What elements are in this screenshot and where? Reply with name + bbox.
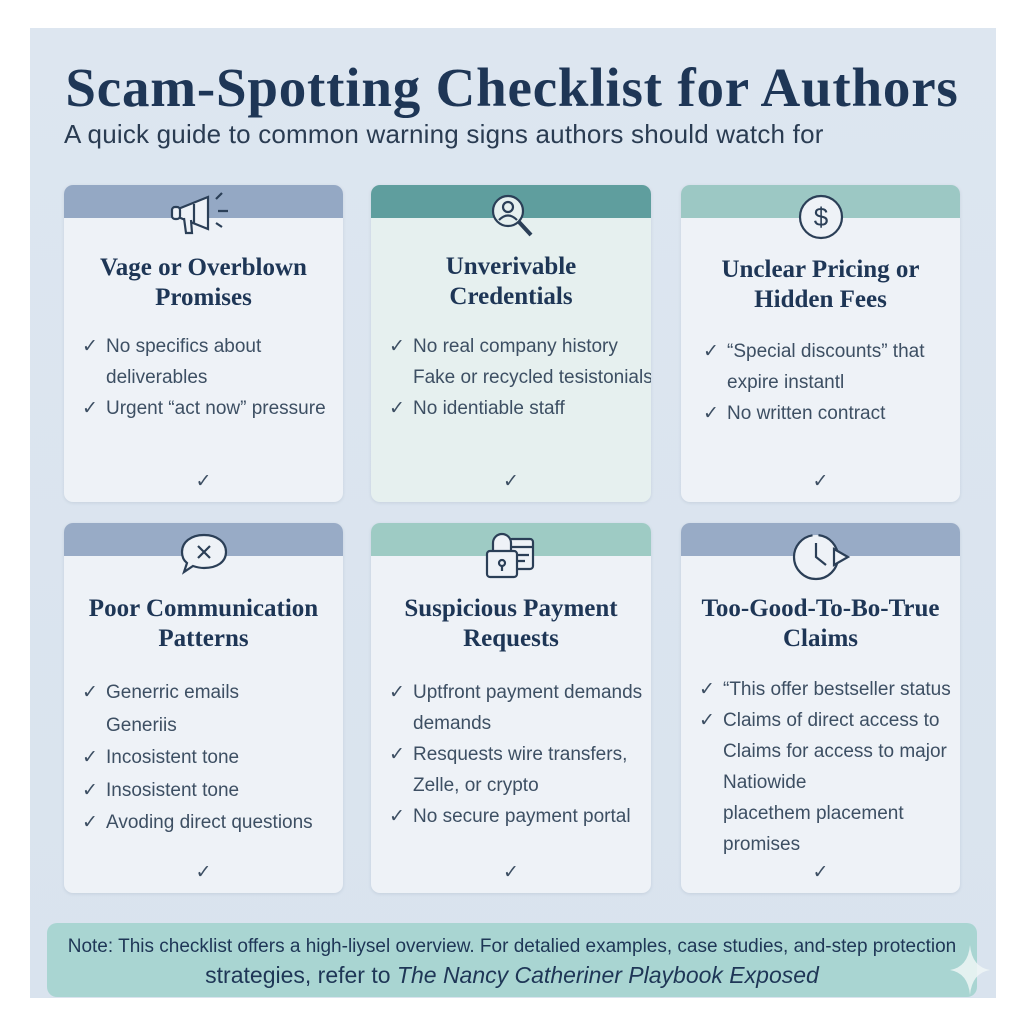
heading: Suspicious Payment xyxy=(404,595,618,622)
title: Scam-Spotting Checklist for Authors xyxy=(65,57,959,118)
bullets: Incosistent tone xyxy=(106,747,239,768)
bullets: Claims for access to major xyxy=(723,741,947,762)
bullets: Zelle, or crypto xyxy=(413,775,539,796)
bullets: Claims of direct access to xyxy=(723,710,939,731)
heading: Too-Good-To-Bo-True xyxy=(701,595,940,622)
panel: credentials: ✓ xyxy=(503,471,519,492)
icon: dollar xyxy=(798,194,844,240)
icon: magnifier xyxy=(492,194,532,236)
icon: megaphone xyxy=(170,192,228,234)
bullets: deliverables xyxy=(106,367,207,388)
panel: payment xyxy=(371,523,651,893)
heading xyxy=(404,595,618,652)
bullets: demands xyxy=(413,713,491,734)
note callout: strategies, refer to The Nancy Catheriner Playbook Exposed xyxy=(205,962,819,988)
note callout xyxy=(47,923,977,997)
bullets: No identiable staff xyxy=(413,398,565,419)
panel: communication: ✓ xyxy=(196,862,211,883)
icon: sparkle xyxy=(950,946,989,994)
heading: Requests xyxy=(463,625,559,652)
bullets: No real company history xyxy=(413,336,618,357)
icon: dollar: $ xyxy=(813,202,828,232)
subtitle: A quick guide to common warning signs authors should watch for xyxy=(64,119,824,149)
bullets: Fake or recycled tesistonials xyxy=(413,367,651,388)
panel: communication xyxy=(64,523,343,893)
bullets: Natiowide xyxy=(723,772,806,793)
heading: Poor Communication xyxy=(89,595,318,622)
heading xyxy=(100,254,307,311)
heading xyxy=(701,595,940,652)
bullets: No specifics about xyxy=(106,336,261,357)
note callout: Note: This checklist offers a high-liysel overview. For detalied examples, case studies, and-step protection xyxy=(68,936,956,957)
bullets xyxy=(84,682,313,833)
heading: Promises xyxy=(155,284,252,311)
bullets: Avoding direct questions xyxy=(106,812,313,833)
heading xyxy=(446,253,576,310)
icon: clock xyxy=(792,534,850,580)
heading: Claims xyxy=(783,625,858,652)
bullets: No secure payment portal xyxy=(413,806,631,827)
heading: Unclear Pricing or xyxy=(721,256,920,283)
bullets: promises xyxy=(723,834,800,855)
bullets xyxy=(84,336,326,419)
bullets: Generric emails xyxy=(106,682,239,703)
bullets: Insosistent tone xyxy=(106,780,239,800)
bullets xyxy=(392,682,642,827)
heading: Vage or Overblown xyxy=(100,254,307,281)
heading: Unverivable xyxy=(446,253,576,280)
bullets: Generiis xyxy=(106,714,177,736)
bullets: Resquests wire transfers, xyxy=(413,744,627,765)
bullets xyxy=(392,336,651,419)
heading xyxy=(721,256,920,313)
heading: Hidden Fees xyxy=(754,286,887,313)
bullets: No written contract xyxy=(727,403,885,424)
bullets: Uptfront payment demands xyxy=(413,682,642,703)
icon: lock and card xyxy=(486,532,534,578)
bullets: expire instantl xyxy=(727,372,844,393)
icon: speech bubble xyxy=(180,534,228,575)
heading: Patterns xyxy=(158,625,249,652)
panel: pricing: ✓ xyxy=(813,471,828,492)
bullets: “This offer bestseller status xyxy=(723,679,951,700)
panel: too good claims: ✓ xyxy=(813,862,828,883)
panel: credentials xyxy=(371,185,651,502)
panel: payment: ✓ xyxy=(503,862,519,883)
panel: vague promises xyxy=(64,185,343,502)
panel: pricing xyxy=(681,185,960,502)
panel: too good claims xyxy=(681,523,960,893)
bullets: placethem placement xyxy=(723,803,904,824)
panel: vague promises: ✓ xyxy=(196,471,211,492)
bullets xyxy=(706,341,924,424)
bullets: “Special discounts” that xyxy=(727,341,924,362)
heading: Credentials xyxy=(449,283,573,310)
heading xyxy=(89,595,318,652)
bullets: Urgent “act now” pressure xyxy=(106,398,326,419)
bullets xyxy=(702,679,951,855)
